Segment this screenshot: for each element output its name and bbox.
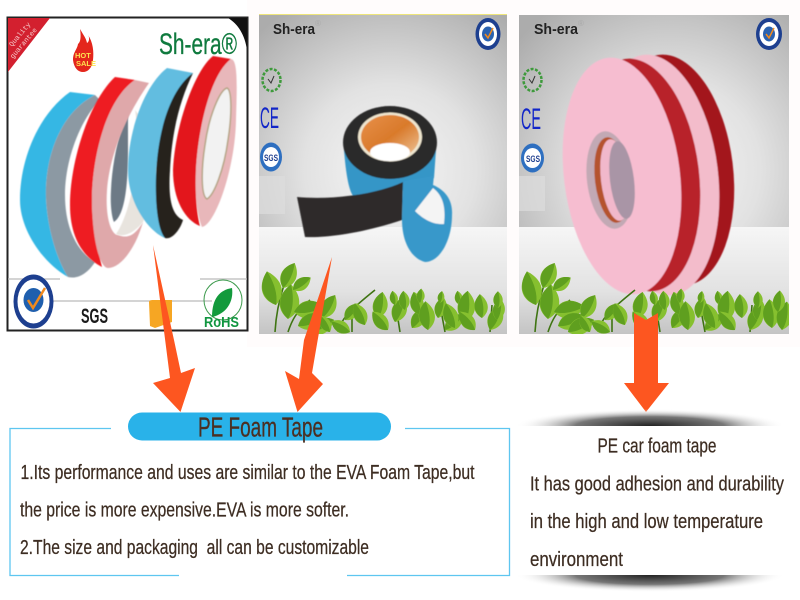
- text block: the price is more expensive.EVA is more softer.: [20, 500, 349, 522]
- icon: hot sale flame: SALE: [76, 59, 96, 68]
- panel: black and blue tape photo: [258, 14, 508, 339]
- icon: badge: [756, 18, 782, 50]
- panel: pink and red tape photo: CE: [521, 103, 541, 136]
- panel: PE car foam tape: [515, 409, 800, 592]
- panel: pink and red tape photo: [518, 15, 795, 339]
- text block: [20, 462, 475, 559]
- arrow: middle: [285, 257, 332, 412]
- brand logo: ®: [578, 19, 584, 28]
- arrow: right: [624, 313, 669, 412]
- tape roll: red and pink: [70, 77, 149, 268]
- blue tape loop: [402, 175, 452, 262]
- black corner: [228, 18, 247, 50]
- text block: [530, 474, 784, 571]
- icon: SGS seal: SGS: [264, 153, 278, 163]
- quality ribbon: guarantee: [9, 27, 40, 61]
- image backdrop: [247, 0, 800, 347]
- brand logo: Sh-era®: [159, 28, 237, 61]
- tape roll: blue and grey: [20, 92, 128, 278]
- icon: badge: [476, 18, 500, 50]
- loose tape strip: [297, 182, 403, 237]
- arrow: left: [153, 245, 195, 412]
- panel: PE foam tape: [10, 412, 510, 576]
- subheading: PE car foam tape: [598, 436, 716, 458]
- divider lines: [8, 279, 247, 301]
- quality ribbon: Quality: [8, 21, 33, 49]
- tape roll: red and pink, right: [173, 56, 237, 227]
- icon: wreath: [524, 69, 542, 91]
- icon: orange bag: [149, 300, 172, 328]
- tape roll: black face with blue side: [297, 106, 452, 262]
- text block: 2.The size and packaging all can be customizable: [20, 537, 369, 559]
- brand logo: Sh-era: [273, 21, 316, 38]
- icon: wreath: [262, 69, 280, 91]
- icon: assurance badge: [14, 274, 54, 328]
- bottom shadow: [515, 558, 785, 592]
- brand logo: ®: [315, 19, 321, 28]
- icon: SGS seal: SGS: [526, 154, 540, 164]
- icon: SGS seal: [260, 142, 282, 172]
- brand logo: Sh-era: [534, 21, 579, 38]
- heading pill: PE Foam Tape: [198, 412, 323, 442]
- tape roll: pink face with red layers: [550, 48, 747, 302]
- panel: black and blue tape photo: CE: [260, 102, 279, 135]
- tape roll: light blue and black: [116, 68, 193, 238]
- foliage: [262, 263, 505, 334]
- quality ribbon: [8, 18, 50, 72]
- box outline: [10, 428, 510, 576]
- icon: RoHS: [204, 280, 242, 331]
- icon: hot sale flame: [73, 29, 96, 72]
- top shadow: [515, 409, 785, 443]
- icon: RoHS: RoHS: [204, 314, 239, 331]
- text block: 1.Its performance and uses are similar to the EVA Foam Tape,but: [20, 462, 475, 484]
- icon: SGS seal: [521, 144, 544, 172]
- icon: hot sale flame: HOT: [75, 51, 91, 60]
- icon: SGS: SGS: [81, 305, 108, 328]
- foliage: [522, 263, 789, 334]
- text block: environment: [530, 549, 623, 571]
- panel: tape rolls photo: [8, 18, 248, 331]
